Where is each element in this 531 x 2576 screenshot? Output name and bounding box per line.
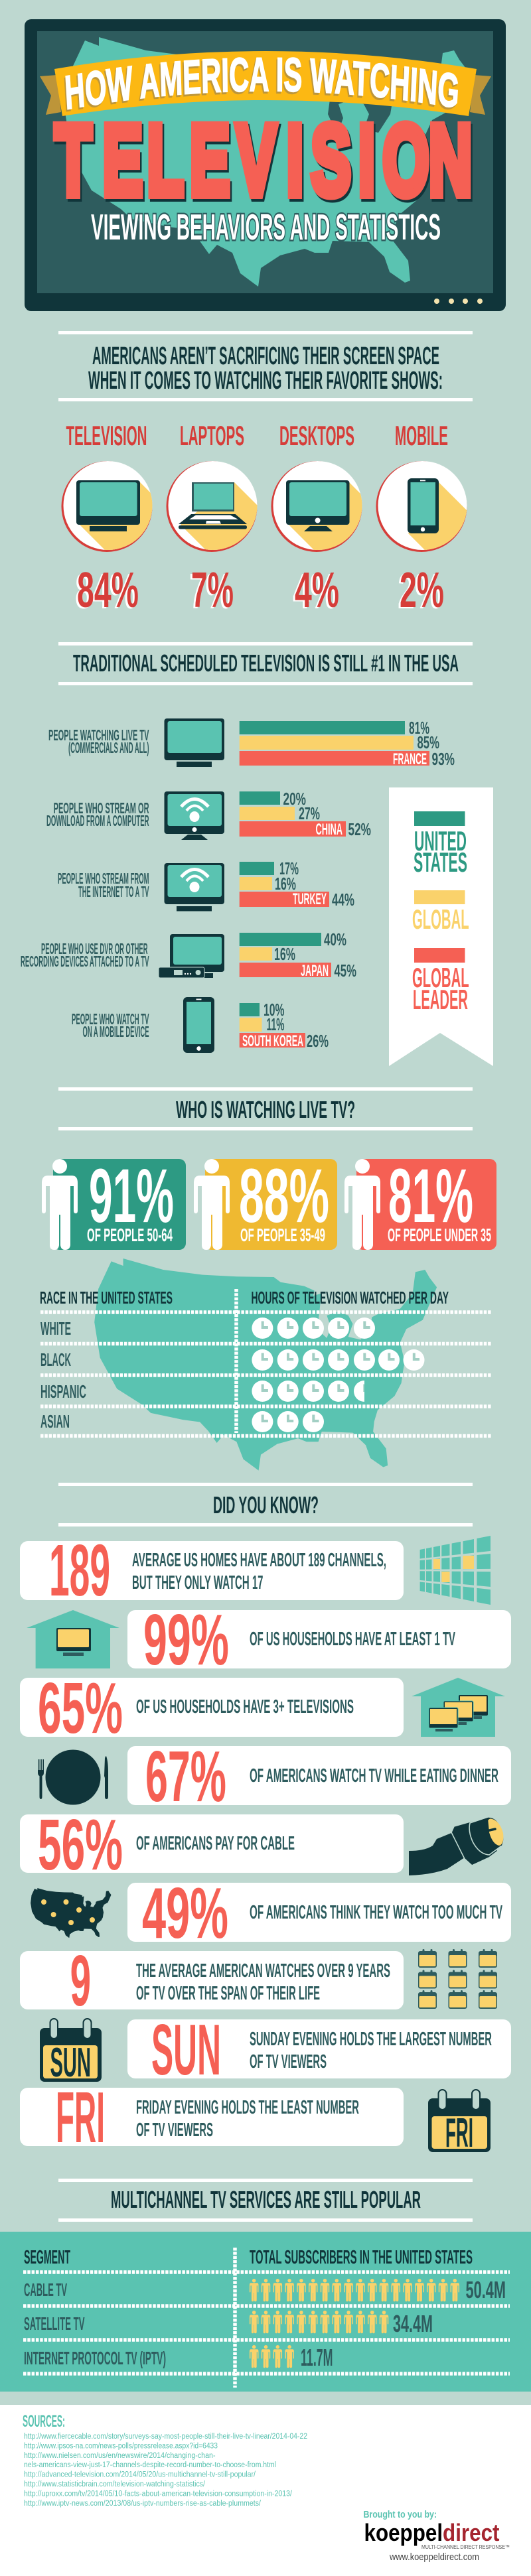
bars [240,1000,329,1051]
chart: dvr row [21,929,356,981]
fact: 65% [20,1668,505,1749]
row: black: BLACK [40,1349,71,1370]
row: white [40,1318,375,1339]
device labels [66,420,448,451]
fact: 9 years: OF TV OVER THE SPAN OF THEIR LIFE [136,1983,320,2004]
panel: multichannel table [0,2232,531,2392]
icon: monitor with dvr [159,934,224,978]
bars: TURKEY [293,890,327,908]
tv screen [37,31,493,293]
panel: age 35-49 [194,1154,337,1250]
fact: 99% [27,1599,511,1680]
bars [240,929,356,981]
icon: tv [165,718,224,767]
icon: tv with wifi [165,863,224,912]
heading: who is watching live tv: WHO IS WATCHING LIVE TV? [176,1096,355,1123]
icon: phone [183,997,214,1053]
row: asian: ASIAN [40,1411,70,1432]
device percentages: 4% [295,562,339,618]
panel: device share [61,426,467,609]
icon: house with tv [27,1610,119,1668]
panel: age 50-64: OF PEOPLE 50-64 [87,1225,173,1245]
row: white: WHITE [40,1318,71,1339]
map background [94,1258,437,1471]
sources list [24,2433,307,2508]
panel: race table [40,1258,492,1471]
bars: SOUTH KOREA [242,1032,303,1050]
bars: 20% [283,789,306,809]
fact: friday [20,2077,491,2158]
heading: did you know [58,1483,473,1526]
fact: friday: FRI [56,2077,105,2158]
chart: mobile row: PEOPLE WHO WATCH TV [72,1010,149,1028]
row: satellite tv: 34.4M [393,2310,433,2337]
icon: friday calendar: FRI [445,2110,473,2156]
bars: 52% [348,819,371,839]
icon: mobile circle [376,461,467,552]
fact: 65%: 65% [38,1668,123,1749]
chart: dvr row: PEOPLE WHO USE DVR OR OTHER [41,940,148,957]
ribbon tails [40,75,491,115]
device percentages: 84% [77,562,139,618]
bars: 81% [409,718,429,738]
chart: mobile row [72,997,329,1053]
bars: 11% [267,1014,284,1034]
fact: 99%: 99% [143,1599,229,1680]
legend: united states: UNITED [414,825,467,856]
bars [240,789,371,839]
sources list: nels-americans-view-just-17-channels-despite-record-number-to-choose-from.html [24,2461,276,2469]
sponsor logo [364,2509,510,2563]
tv indicator lights [434,299,483,304]
chart: stream to tv row: THE INTERNET TO A TV [78,883,149,900]
panel: multichannel table: 11.7M [301,2344,333,2371]
device percentages: 7% [191,562,234,618]
bars: 26% [307,1031,329,1051]
heading: screen space [58,331,473,401]
chart: stream from computer row [46,789,371,840]
chart: stream to tv row: PEOPLE WHO STREAM FROM [58,870,149,887]
table headers: SEGMENT [24,2247,70,2268]
title: how america is watching: HOW AMERICA IS WATCHING [64,57,458,111]
heading: who is watching live tv [58,1087,473,1130]
bars: 85% [417,732,439,752]
legend: global [412,890,469,935]
sources list: http://www.iptv-news.com/2013/08/us-iptv-numbers-rise-as-cable-plummets/ [24,2500,262,2508]
icon: map with dots [31,1888,112,1938]
bars: CHINA [316,821,342,839]
icon: sunday calendar [40,2019,102,2086]
legend: united states [414,811,467,878]
chart: mobile row: ON A MOBILE DEVICE [82,1023,149,1040]
table headers [24,2247,473,2268]
fact: 56%: 56% [38,1804,123,1885]
bars: JAPAN [301,962,329,980]
table headers: RACE IN THE UNITED STATES [40,1288,173,1308]
legend: global leader [412,948,469,1015]
icon: sunday calendar: SUN [50,2040,91,2086]
bars [240,718,455,769]
chart: stream to tv row [58,858,354,912]
fact: sunday [40,2009,511,2090]
bars: 45% [335,961,356,981]
row: iptv: INTERNET PROTOCOL TV (IPTV) [24,2348,166,2368]
fact: sunday: SUN [151,2009,221,2090]
chart: dvr row: RECORDING DEVICES ATTACHED TO A TV [21,953,149,970]
bars: 16% [274,944,295,964]
panel: hero television [25,19,506,311]
panel: age 50-64: 91% [89,1154,174,1239]
device labels: DESKTOPS [279,420,354,451]
chart: stream from computer row: DOWNLOAD FROM A COMPUTER [46,812,149,829]
legend ribbon: LEADER [413,984,468,1015]
sponsor logo: Brought to you by: [364,2509,437,2520]
panel: age 35-49: OF PEOPLE 35-49 [240,1225,325,1245]
icon: television circle [61,461,153,552]
icon: desktop with wifi [165,791,224,840]
row: cable tv: 50.4M [466,2276,506,2303]
device percentages [77,562,444,618]
bars: 17% [279,858,299,878]
fact: 49% [31,1873,511,1954]
icon: house with three tvs [412,1678,505,1737]
heading: traditional scheduled television [58,642,473,685]
fact: 189 channels: BUT THEY ONLY WATCH 17 [132,1572,263,1593]
icon: plate and cutlery [38,1750,108,1804]
fact: 56%: OF AMERICANS PAY FOR CABLE [136,1833,295,1854]
row: hispanic: HISPANIC [40,1381,86,1402]
icon: friday calendar [428,2090,491,2156]
legend: united states: STATES [414,847,467,878]
fact: 189 channels [20,1530,491,1611]
sources list: http://www.fiercecable.com/story/surveys-say-most-people-still-their-live-tv-linear/2014-04-22 [24,2433,307,2441]
bars: 10% [264,1000,284,1020]
sponsor logo: koeppeldirect [364,2519,499,2546]
sponsor logo: MULTI-CHANNEL DIRECT RESPONSE™ [421,2543,510,2550]
legend ribbon: GLOBAL [412,904,469,935]
panel: age 35-49: 88% [239,1154,329,1239]
row: black [40,1349,425,1371]
chart: live tv row: PEOPLE WATCHING LIVE TV [48,726,149,744]
device percentages: 2% [400,562,444,618]
row: satellite tv: SATELLITE TV [24,2313,85,2334]
title: television: TELEVISION [55,105,472,216]
sources list: http://uproxx.com/tv/2014/05/10-facts-about-american-television-consumption-in-2013/ [24,2490,293,2498]
fact: 67%: 67% [145,1736,226,1817]
bars: 16% [275,874,296,894]
fact: sunday: OF TV VIEWERS [250,2051,327,2072]
heading: did you know: DID YOU KNOW? [213,1491,319,1519]
bars: FRANCE [393,750,427,768]
bars: 93% [431,749,455,769]
row: hispanic [40,1381,375,1402]
bars: 40% [324,929,346,949]
icon: desktop circle [271,461,362,552]
sources list: http://advanced-television.com/2014/05/20/us-multichannel-tv-still-popular/ [24,2471,256,2479]
device labels: LAPTOPS [180,420,244,451]
icon: laptop circle [166,461,258,552]
heading: multichannel tv services [58,2179,473,2222]
icon: nine calendars [418,1949,497,2009]
sources list: http://www.ipsos-na.com/news-polls/pressrelease.aspx?id=6433 [24,2442,218,2450]
sponsor logo: www.koeppeldirect.com [389,2551,479,2563]
chart: stream from computer row: PEOPLE WHO STREAM OR [54,799,149,817]
row: cable tv [24,2276,506,2303]
panel: footer [0,2405,531,2576]
panel: footer: SOURCES: [23,2412,65,2431]
row: asian [40,1411,324,1432]
fact: 49%: 49% [142,1873,228,1954]
fact: 67% [38,1736,511,1817]
chart: live tv row: (COMMERCIALS AND ALL) [68,739,149,756]
device labels: TELEVISION [66,420,147,451]
fact: 9 years: 9 [70,1940,91,2021]
sources list: http://www.nielsen.com/us/en/newswire/2014/changing-chan- [24,2452,216,2460]
panel: age under 35 [344,1154,496,1250]
panel: age 50-64 [42,1154,186,1250]
sources list: http://www.statisticbrain.com/television-watching-statistics/ [24,2480,206,2488]
legend ribbon: GLOBAL [412,962,469,993]
bars: 44% [332,890,354,910]
icon: cable plug [409,1816,508,1875]
row: satellite tv [24,2310,433,2337]
row: cable tv: CABLE TV [24,2279,67,2300]
fact: friday: OF TV VIEWERS [136,2120,213,2141]
table headers [40,1288,449,1308]
chart: live tv row [48,718,455,769]
bars [240,858,354,910]
panel: device share: MOBILE [395,420,448,451]
bars: 27% [299,803,320,823]
legend ribbon [389,787,493,1066]
map of the United States [65,37,468,287]
ribbon [54,51,477,116]
fact: 56% [20,1814,503,1875]
tv bezel [25,19,506,311]
fact: 9 years [20,1940,497,2021]
icon: channel grid [419,1536,491,1605]
fact: 189 channels: 189 [49,1530,110,1611]
